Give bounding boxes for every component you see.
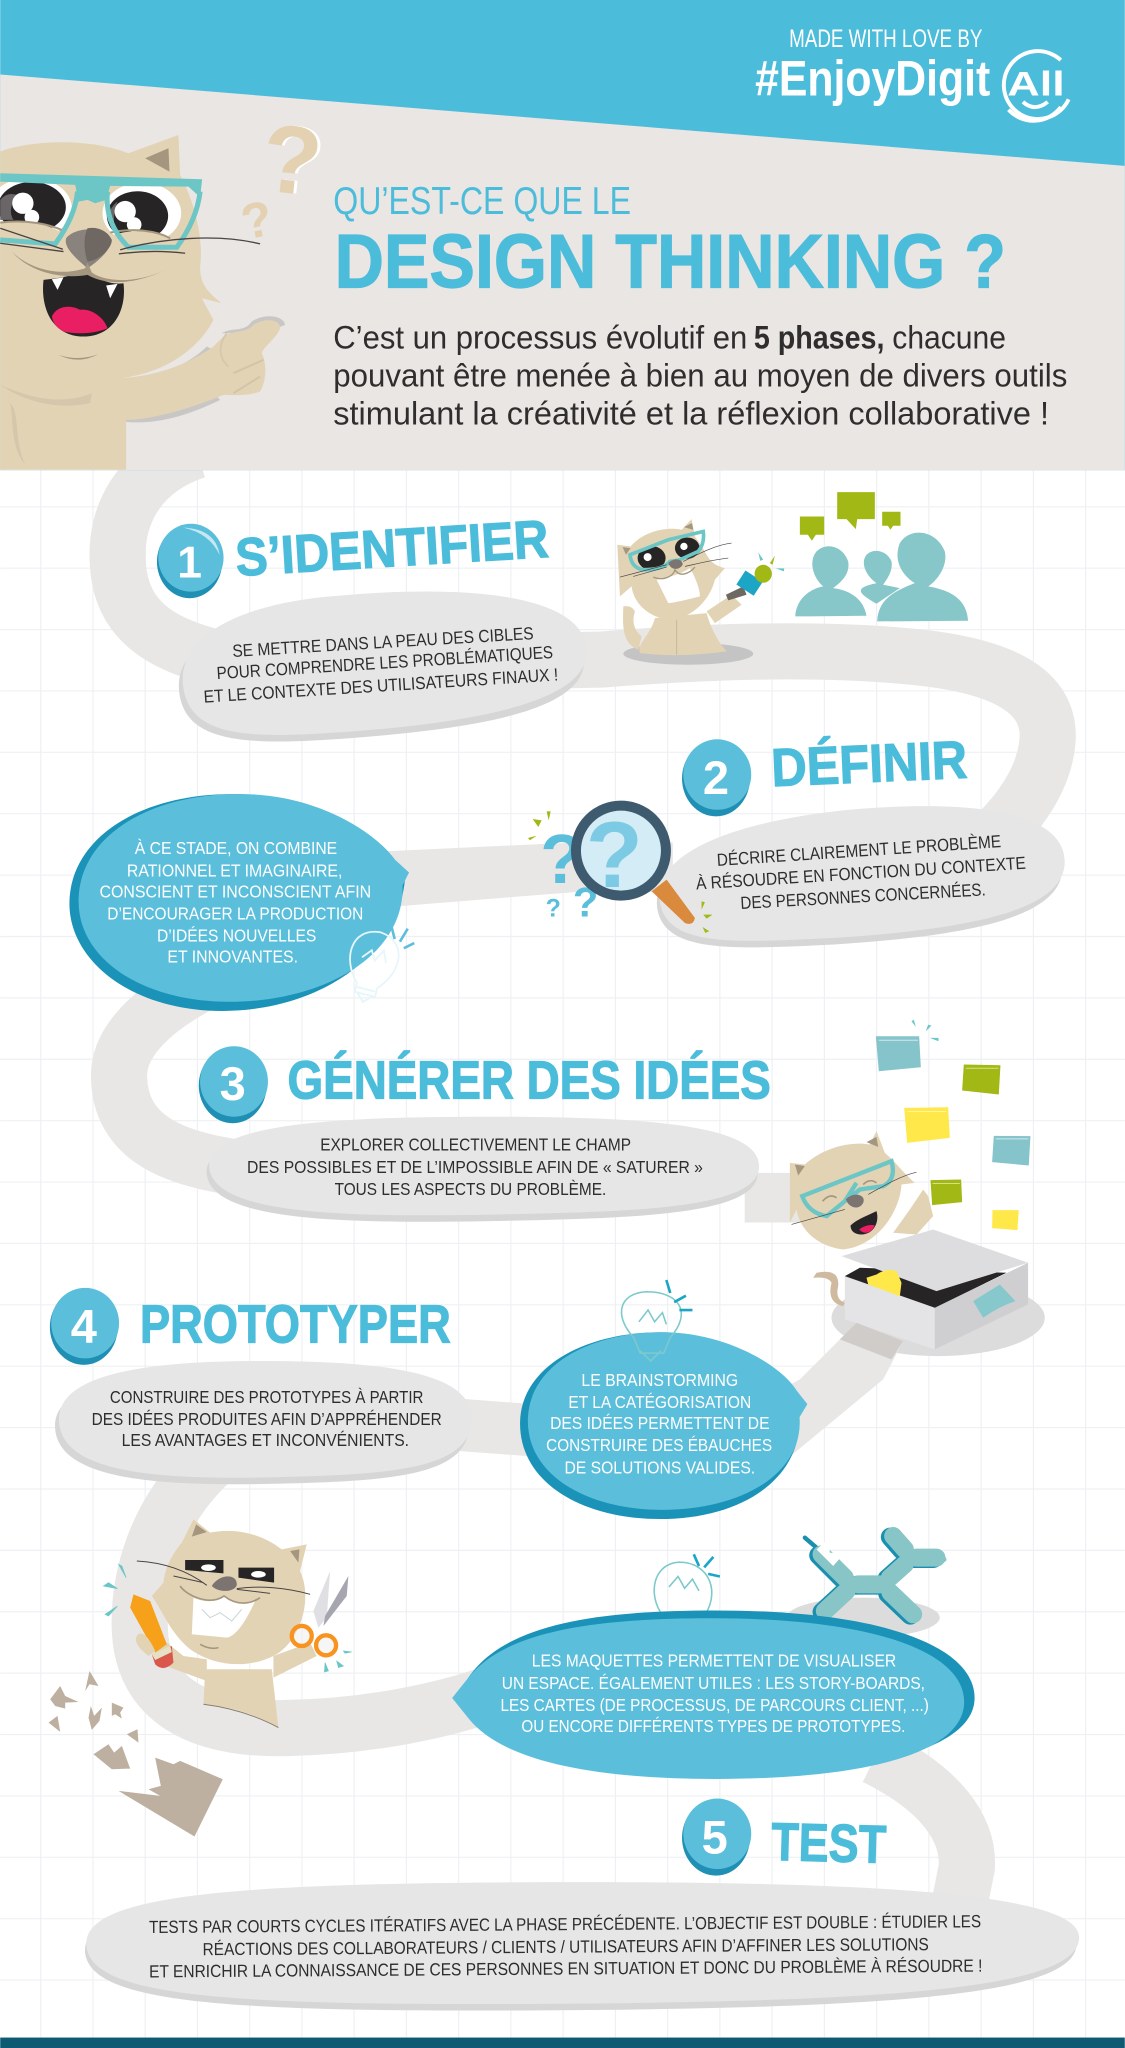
icon: main cat with glasses: ? [260,104,330,217]
icon: happy cat with box and sticky notes [767,1020,1045,1456]
blue bubble: mockups: LES MAQUETTES PERMETTENT DE VISUALISER [532,1651,896,1671]
step 2 heading: DÉFINIR [770,730,968,798]
step 4 text bubble: DES IDÉES PRODUITES AFIN D’APPRÉHENDER [92,1409,442,1429]
blue bubble: brainstorming [520,1332,807,1519]
step 2 text bubble [657,806,1065,947]
step 1 text bubble: POUR COMPRENDRE LES PROBLÉMATIQUES [216,642,554,683]
header credit: made with love by EnjoyDigitAll: #EnjoyDigit [755,50,990,106]
step 5 text bubble [85,1882,1079,2011]
blue bubble: brainstorming: DE SOLUTIONS VALIDES. [564,1457,755,1477]
intro paragraph: 5 phases, [754,320,884,356]
icon: light bulb above mockups bubble [654,1554,720,1638]
icon: magnifying glass with question marks: ? [573,878,598,925]
header credit: made with love by EnjoyDigitAll [755,26,1069,121]
step 1 heading: S’IDENTIFIER [234,510,550,588]
footer bar [0,2038,1125,2048]
icon: magnifying glass with question marks: ? [546,894,561,922]
blue bubble: brainstorming: LE BRAINSTORMING [581,1370,738,1390]
icon: light bulb above brainstorming bubble [622,1280,692,1361]
icon: magnifying glass with question marks: ? [586,803,643,907]
step 3 text bubble: TOUS LES ASPECTS DU PROBLÈME. [335,1179,606,1199]
icon: spark lines near bulb [391,923,414,948]
step 5 badge [682,1799,751,1876]
blue bubble: combine rationnel et imaginaire: CONSCIENT ET INCONSCIENT AFIN [99,881,371,901]
icon: main cat with glasses: ? [257,104,327,217]
step 2 text bubble: DES PERSONNES CONCERNÉES. [740,879,986,913]
icon: maker cat with pencil and scissors [49,1519,352,1837]
step 5 badge: 5 [702,1810,728,1863]
intro paragraph: pouvant être menée à bien au moyen de divers outils [333,358,1067,394]
blue bubble: combine rationnel et imaginaire: ET INNOVANTES. [167,947,298,967]
intro paragraph: C’est un processus évolutif en [333,320,747,356]
blue bubble: combine rationnel et imaginaire [69,794,409,1011]
icon: main cat with glasses: ? [236,190,278,251]
blue bubble: combine rationnel et imaginaire: D’ENCOURAGER LA PRODUCTION [107,904,363,924]
blue bubble: mockups: OU ENCORE DIFFÉRENTS TYPES DE PROTOTYPES. [521,1716,905,1736]
intro paragraph [333,320,1067,431]
icon: magnifying glass with question marks [528,803,713,933]
icon: cat interviewing with microphone [617,492,968,665]
step 2 badge [682,739,751,816]
step 5 heading: TEST [771,1813,887,1875]
blue bubble: brainstorming: DES IDÉES PERMETTENT DE [550,1413,770,1433]
header credit: made with love by EnjoyDigitAll: MADE WITH LOVE BY [789,26,982,53]
step 1 text bubble [179,591,587,741]
step 3 text bubble [207,1117,759,1222]
intro paragraph: chacune [892,320,1006,356]
step 4 text bubble [55,1361,472,1484]
step 2 text bubble: DÉCRIRE CLAIREMENT LE PROBLÈME [716,831,1002,870]
step 4 heading: PROTOTYPER [140,1296,451,1355]
step 5 text bubble: ET ENRICHIR LA CONNAISSANCE DE CES PERSONNES EN SITUATION ET DONC DU PROBLÈME À RÉSOUDRE ! [149,1956,982,1981]
title: DESIGN THINKING ? [335,219,1006,304]
step 3 text bubble: EXPLORER COLLECTIVEMENT LE CHAMP [320,1135,631,1155]
step 3 heading: GÉNÉRER DES IDÉES [288,1050,771,1110]
step 3 badge [199,1046,268,1123]
icon: main cat with glasses [0,104,330,470]
icon: light bulb on blue bubble [340,926,404,1008]
step 3 text bubble: DES POSSIBLES ET DE L’IMPOSSIBLE AFIN DE « SATURER » [247,1157,703,1177]
step 1 text bubble: ET LE CONTEXTE DES UTILISATEURS FINAUX ! [203,664,559,707]
winding road path [118,451,1048,1920]
step 4 text bubble: LES AVANTAGES ET INCONVÉNIENTS. [122,1430,409,1450]
step 4 badge [50,1288,119,1365]
blue bubble: brainstorming: ET LA CATÉGORISATION [568,1392,751,1412]
step 1 badge: 1 [177,538,202,587]
step 2 text bubble: À RÉSOUDRE EN FONCTION DU CONTEXTE [695,853,1026,893]
intro paragraph: stimulant la créativité et la réflexion collaborative ! [333,395,1049,431]
blue bubble: brainstorming: CONSTRUIRE DES ÉBAUCHES [546,1435,772,1455]
blue bubble: combine rationnel et imaginaire: RATIONNEL ET IMAGINAIRE, [127,860,342,880]
step 1 text bubble: SE METTRE DANS LA PEAU DES CIBLES [232,623,534,661]
blue bubble: mockups: UN ESPACE. ÉGALEMENT UTILES : LES STORY-BOARDS, [502,1673,925,1693]
icon: magnifying glass with question marks: ? [540,820,583,898]
step 5 text bubble: RÉACTIONS DES COLLABORATEURS / CLIENTS / UTILISATEURS AFIN D’AFFINER LES SOLUTIONS [203,1934,929,1959]
header banner [0,0,1125,470]
blue bubble: combine rationnel et imaginaire: À CE STADE, ON COMBINE [135,838,337,858]
step 3 badge: 3 [220,1057,246,1110]
icon: balloon dog [787,1536,946,1638]
blue bubble: mockups [452,1610,975,1779]
step 4 badge: 4 [71,1300,97,1353]
step 2 badge: 2 [703,751,729,804]
step 5 text bubble: TESTS PAR COURTS CYCLES ITÉRATIFS AVEC LA PHASE PRÉCÉDENTE. L’OBJECTIF EST DOUBLE : ÉTUDIER LES [149,1911,981,1937]
title [333,180,1006,304]
step 4 text bubble: CONSTRUIRE DES PROTOTYPES À PARTIR [110,1387,423,1407]
title: QU’EST-CE QUE LE [333,180,631,223]
blue bubble: combine rationnel et imaginaire: D’IDÉES NOUVELLES [157,926,316,946]
step 1 badge [157,524,224,598]
blue bubble: mockups: LES CARTES (DE PROCESSUS, DE PARCOURS CLIENT, ...) [500,1695,929,1715]
header credit: made with love by EnjoyDigitAll: All [1007,65,1065,103]
